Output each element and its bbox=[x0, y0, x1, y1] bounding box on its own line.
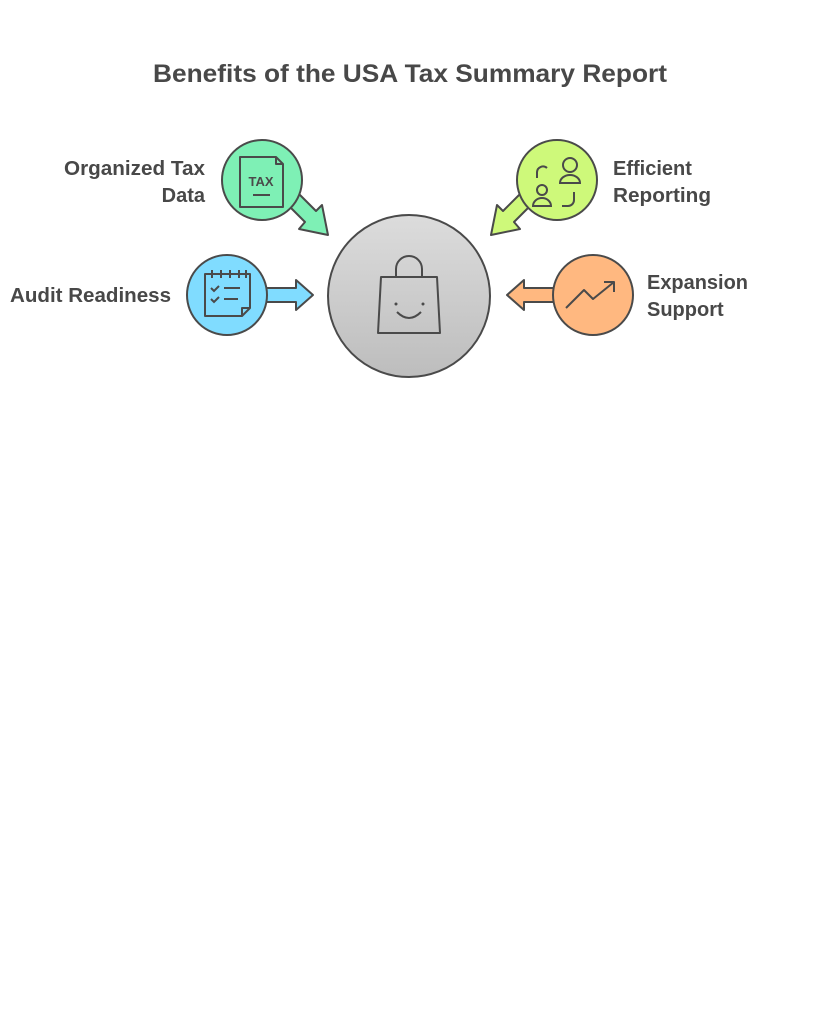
item: organized tax data: TAX bbox=[248, 174, 274, 189]
item: audit readiness bbox=[10, 255, 313, 335]
label: Expansion bbox=[647, 272, 748, 294]
label: Organized Tax bbox=[64, 158, 205, 180]
item: expansion support bbox=[507, 255, 748, 335]
title: Benefits of the USA Tax Summary Report bbox=[153, 60, 668, 88]
label: Efficient bbox=[613, 158, 692, 180]
center circle: shopping bag bbox=[328, 215, 490, 377]
label: data: Data bbox=[162, 185, 206, 207]
item: organized tax data bbox=[64, 140, 328, 235]
label: Audit Readiness bbox=[10, 285, 171, 307]
item: efficient reporting bbox=[491, 140, 692, 235]
label: reporting: Reporting bbox=[613, 185, 711, 207]
label: support: Support bbox=[647, 299, 724, 321]
